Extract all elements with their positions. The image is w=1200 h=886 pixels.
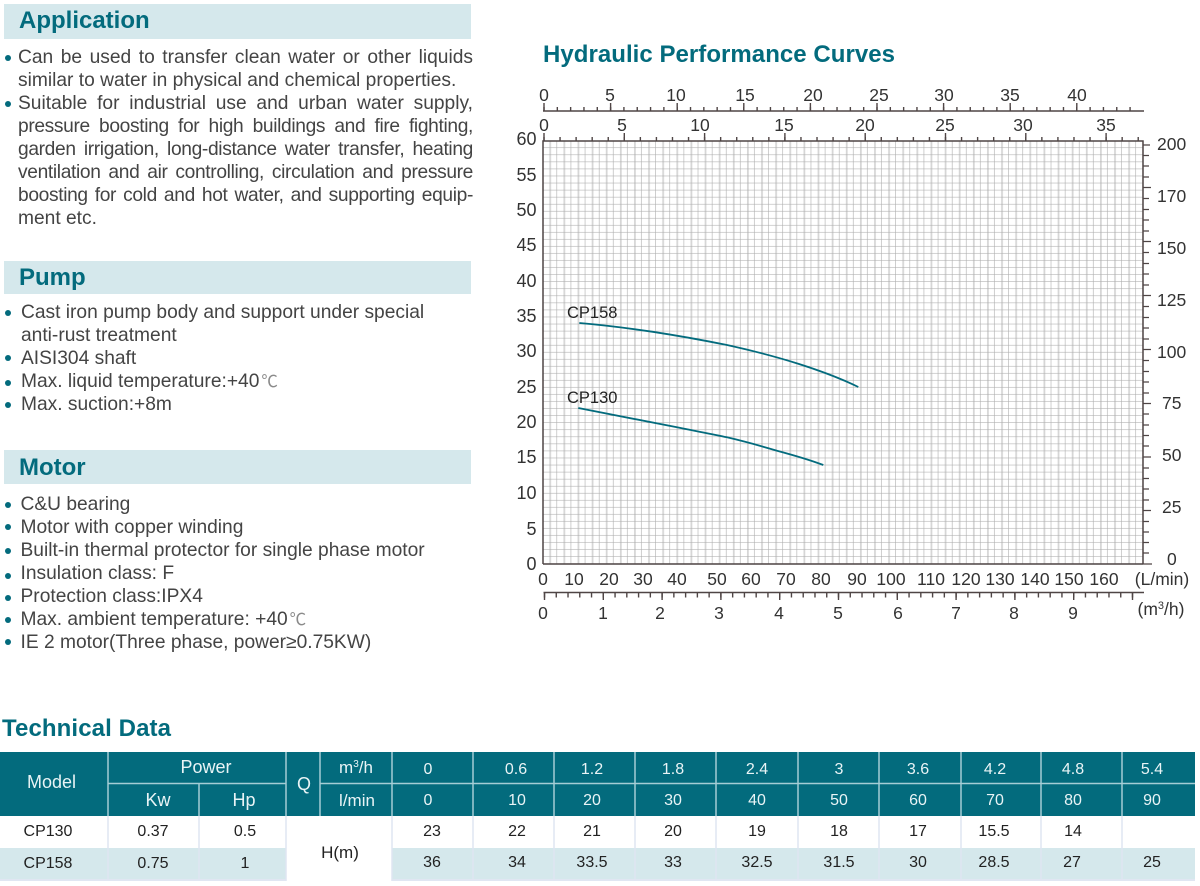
table header: 0 xyxy=(424,792,433,809)
bottom axis: cubic metres per hour: 3 xyxy=(714,603,724,623)
left axis: head in metres: 55 xyxy=(516,165,536,185)
table header: 4.8 xyxy=(1062,761,1084,778)
text block: Motor list: Insulation class: F xyxy=(20,563,174,584)
table header: 80 xyxy=(1064,792,1082,809)
bottom axis: L/min: 30 xyxy=(633,569,653,589)
bottom axis: L/min: 150 xyxy=(1054,569,1084,589)
bottom axis: cubic metres per hour: 6 xyxy=(893,603,903,623)
second top axis: IMP gal/min scale: 15 xyxy=(774,115,794,135)
table header: 30 xyxy=(664,792,682,809)
chart frame xyxy=(543,141,1143,564)
chart grid xyxy=(543,141,1143,564)
top axis: US gal/min scale: 20 xyxy=(803,85,823,105)
text block: Motor list: Max. ambient temperature: +40℃ xyxy=(20,609,306,630)
table row: CP158: CP158 xyxy=(24,855,73,872)
left axis: head in metres: 40 xyxy=(516,271,536,291)
bottom axis: L/min: 90 xyxy=(847,569,867,589)
table row: CP158: 33 xyxy=(664,854,682,871)
table header: m xyxy=(339,758,353,777)
left axis: head in metres: 10 xyxy=(516,483,536,503)
bottom axis: cubic metres per hour: 3 xyxy=(1158,600,1164,612)
text block: Application list: Suitable for industrial use and urban water supply, xyxy=(18,93,473,114)
top axis: US gal/min scale: 25 xyxy=(869,85,889,105)
heading: Application: Application xyxy=(19,7,150,34)
left axis: head in metres: 60 xyxy=(516,129,536,149)
text block: Pump list: AISI304 shaft xyxy=(21,348,136,369)
text block: Motor list: Motor with copper winding xyxy=(20,517,243,538)
text block: Application list xyxy=(5,47,473,229)
table row: CP158: 25 xyxy=(1143,854,1161,871)
table: technical data xyxy=(0,752,1195,881)
table row: CP130: 20 xyxy=(664,823,682,840)
bottom axis: L/min: 10 xyxy=(564,569,584,589)
bottom axis: cubic metres per hour: 2 xyxy=(655,603,665,623)
text block: Application list: ment etc. xyxy=(18,208,97,229)
bottom axis: L/min: 110 xyxy=(917,569,945,589)
bottom axis: L/min xyxy=(538,569,1189,589)
bottom axis: L/min: 20 xyxy=(599,569,619,589)
left axis: head in metres: 20 xyxy=(516,412,536,432)
table row: CP130: 14 xyxy=(1064,823,1082,840)
table row: CP130: 18 xyxy=(830,823,848,840)
right axis: head in feet: 170 xyxy=(1157,186,1186,206)
right axis: head in feet: 150 xyxy=(1157,238,1186,258)
table header: 3 xyxy=(835,761,844,778)
bottom axis: L/min: 130 xyxy=(985,569,1015,589)
curve: CP158: CP158 xyxy=(567,304,617,322)
table row: CP158: 27 xyxy=(1063,854,1081,871)
text block: Pump list: anti-rust treatment xyxy=(21,325,177,346)
table header: /h xyxy=(359,758,373,777)
left axis: head in metres: 30 xyxy=(516,341,536,361)
table header: 70 xyxy=(986,792,1004,809)
table header xyxy=(27,757,1163,810)
curve: CP130: CP130 xyxy=(567,389,617,407)
table header: 0.6 xyxy=(505,761,527,778)
top axis: US gal/min scale: 30 xyxy=(934,85,954,105)
table cell: H(m): H(m) xyxy=(321,843,359,862)
text block: Motor list: Protection class:IPX4 xyxy=(20,586,203,607)
text block: Pump list xyxy=(5,302,424,415)
table row: CP130: 23 xyxy=(423,823,441,840)
text block: Application list: similar to water in physical and chemical properties. xyxy=(18,70,456,91)
table row: CP158: 33.5 xyxy=(576,854,608,871)
text block: Application list: boosting for cold and hot water, and supporting equip- xyxy=(18,185,473,206)
table header: l/min xyxy=(339,791,375,810)
second top axis: IMP gal/min scale: 35 xyxy=(1096,115,1116,135)
curve: CP130 xyxy=(567,389,823,465)
top axis: US gal/min scale: 40 xyxy=(1067,85,1087,105)
text block: Pump list: Max. suction:+8m xyxy=(21,394,172,415)
table row: CP158: 0.75 xyxy=(137,855,169,872)
left axis: head in metres xyxy=(516,129,536,574)
bottom axis: L/min: 60 xyxy=(741,569,761,589)
heading: Motor xyxy=(4,450,471,484)
right axis: head in feet: 0 xyxy=(1167,549,1177,569)
curve: CP158 xyxy=(567,304,858,387)
table header: Power xyxy=(180,757,232,777)
right axis: head in feet: 75 xyxy=(1162,393,1181,413)
bottom axis: cubic metres per hour: /h) xyxy=(1164,599,1184,619)
right axis: head in feet: 50 xyxy=(1162,445,1182,465)
bottom axis: L/min: 50 xyxy=(707,569,727,589)
heading: Pump xyxy=(4,261,471,294)
bottom axis: cubic metres per hour xyxy=(538,592,1184,623)
second top axis: IMP gal/min scale: 10 xyxy=(690,115,710,135)
text block: Application list: ventilation and air controlling, circulation and pressure xyxy=(18,162,473,183)
bottom axis: L/min: 160 xyxy=(1089,569,1119,589)
second top axis: IMP gal/min scale xyxy=(539,115,1143,139)
text block: Application list: pressure boosting for high buildings and fire fighting, xyxy=(18,116,473,137)
table header: 3 xyxy=(353,759,359,770)
text block: Pump list: Max. liquid temperature:+40℃ xyxy=(21,371,278,392)
table row: CP130: 22 xyxy=(508,823,526,840)
bottom axis: cubic metres per hour: 9 xyxy=(1068,603,1078,623)
top axis: US gal/min scale: 10 xyxy=(666,85,686,105)
top axis: US gal/min scale: 35 xyxy=(1000,85,1020,105)
second top axis: IMP gal/min scale: 30 xyxy=(1013,115,1033,135)
heading: Pump: Pump xyxy=(19,264,86,291)
left axis: head in metres: 35 xyxy=(516,306,536,326)
bottom axis: L/min: 40 xyxy=(667,569,687,589)
table header: Model xyxy=(27,772,76,792)
table row: CP158: 1 xyxy=(241,855,250,872)
bottom axis: L/min: 100 xyxy=(876,569,906,589)
right axis: head in feet xyxy=(1143,134,1186,569)
table header: 4.2 xyxy=(984,761,1006,778)
text block: Application list: Can be used to transfer clean water or other liquids xyxy=(18,47,473,68)
table header: 2.4 xyxy=(746,761,768,778)
table row: CP130: 15.5 xyxy=(978,823,1010,840)
bottom axis: cubic metres per hour: 0 xyxy=(538,603,548,623)
table row: CP130: 19 xyxy=(748,823,766,840)
text block: Motor list xyxy=(5,494,425,653)
bottom axis: cubic metres per hour: 5 xyxy=(833,603,843,623)
table header: Kw xyxy=(145,790,171,810)
second top axis: IMP gal/min scale: 5 xyxy=(617,115,627,135)
text block: Motor list: IE 2 motor(Three phase, power≥0.75KW) xyxy=(20,632,371,653)
heading: Application xyxy=(4,4,471,39)
table row: CP158: 36 xyxy=(423,854,441,871)
top axis: US gal/min scale: 15 xyxy=(735,85,755,105)
bottom axis: L/min: 70 xyxy=(776,569,796,589)
table header: 5.4 xyxy=(1141,761,1163,778)
bottom axis: cubic metres per hour: 8 xyxy=(1009,603,1019,623)
right axis: head in feet: 200 xyxy=(1157,134,1186,154)
table header: 3.6 xyxy=(907,761,929,778)
table header: 0 xyxy=(424,761,433,778)
table row: CP130: 17 xyxy=(909,823,927,840)
text block: Motor list: Built-in thermal protector for single phase motor xyxy=(20,540,425,561)
table backgrounds xyxy=(0,752,1195,881)
table header: Hp xyxy=(232,790,256,810)
second top axis: IMP gal/min scale: 0 xyxy=(539,115,549,135)
table row: CP130: 0.5 xyxy=(234,823,256,840)
left axis: head in metres: 45 xyxy=(516,235,536,255)
second top axis: IMP gal/min scale: 25 xyxy=(935,115,955,135)
table row: CP130: 0.37 xyxy=(137,823,169,840)
table header: 90 xyxy=(1143,792,1161,809)
bottom axis: L/min: 80 xyxy=(811,569,831,589)
heading: Motor: Motor xyxy=(19,454,86,481)
bottom axis: cubic metres per hour: 4 xyxy=(774,603,784,623)
bottom axis: L/min: 120 xyxy=(951,569,981,589)
table row: CP158: 28.5 xyxy=(978,854,1010,871)
left axis: head in metres: 25 xyxy=(516,377,536,397)
text block: Application list: garden irrigation, long-distance water transfer, heating xyxy=(18,139,473,160)
bottom axis: L/min: 140 xyxy=(1020,569,1050,589)
top axis: US gal/min scale: 5 xyxy=(605,85,615,105)
table header: 20 xyxy=(583,792,601,809)
table header: 50 xyxy=(830,792,848,809)
heading: Hydraulic Performance Curves: Hydraulic Performance Curves xyxy=(543,41,895,68)
second top axis: IMP gal/min scale: 20 xyxy=(855,115,875,135)
right axis: head in feet: 125 xyxy=(1157,290,1186,310)
table header: 1.8 xyxy=(662,761,684,778)
table header: 1.2 xyxy=(581,761,603,778)
table row: CP158: 31.5 xyxy=(823,854,855,871)
table header: Q xyxy=(297,774,311,794)
bottom axis: cubic metres per hour: 7 xyxy=(951,603,961,623)
left axis: head in metres: 5 xyxy=(526,519,536,539)
bottom axis: cubic metres per hour: (m xyxy=(1138,599,1158,619)
table header: 10 xyxy=(508,792,526,809)
top axis: US gal/min scale xyxy=(539,85,1144,111)
table row: CP158 xyxy=(24,854,1161,872)
table row: CP158: 32.5 xyxy=(741,854,773,871)
chart: hydraulic performance curves xyxy=(516,85,1189,623)
top axis: US gal/min scale: 0 xyxy=(539,85,549,105)
right axis: head in feet: 100 xyxy=(1157,342,1186,362)
table row: CP130 xyxy=(24,823,1082,840)
table row: CP130: 21 xyxy=(583,823,601,840)
table row: CP158: 30 xyxy=(909,854,927,871)
text block: Motor list: C&U bearing xyxy=(20,494,130,515)
right axis: head in feet: 25 xyxy=(1162,497,1181,517)
table row: CP158: 34 xyxy=(508,854,526,871)
bottom axis: L/min: 0 xyxy=(538,569,548,589)
bottom axis: L/min: (L/min) xyxy=(1135,569,1189,589)
left axis: head in metres: 50 xyxy=(516,200,536,220)
table header: 40 xyxy=(748,792,766,809)
text block: Pump list: Cast iron pump body and support under special xyxy=(21,302,424,323)
table row: CP130: CP130 xyxy=(24,823,73,840)
heading: Technical Data: Technical Data xyxy=(2,715,172,742)
table header: 60 xyxy=(909,792,927,809)
left axis: head in metres: 0 xyxy=(526,554,536,574)
left axis: head in metres: 15 xyxy=(516,447,536,467)
bottom axis: cubic metres per hour: 1 xyxy=(598,603,608,623)
